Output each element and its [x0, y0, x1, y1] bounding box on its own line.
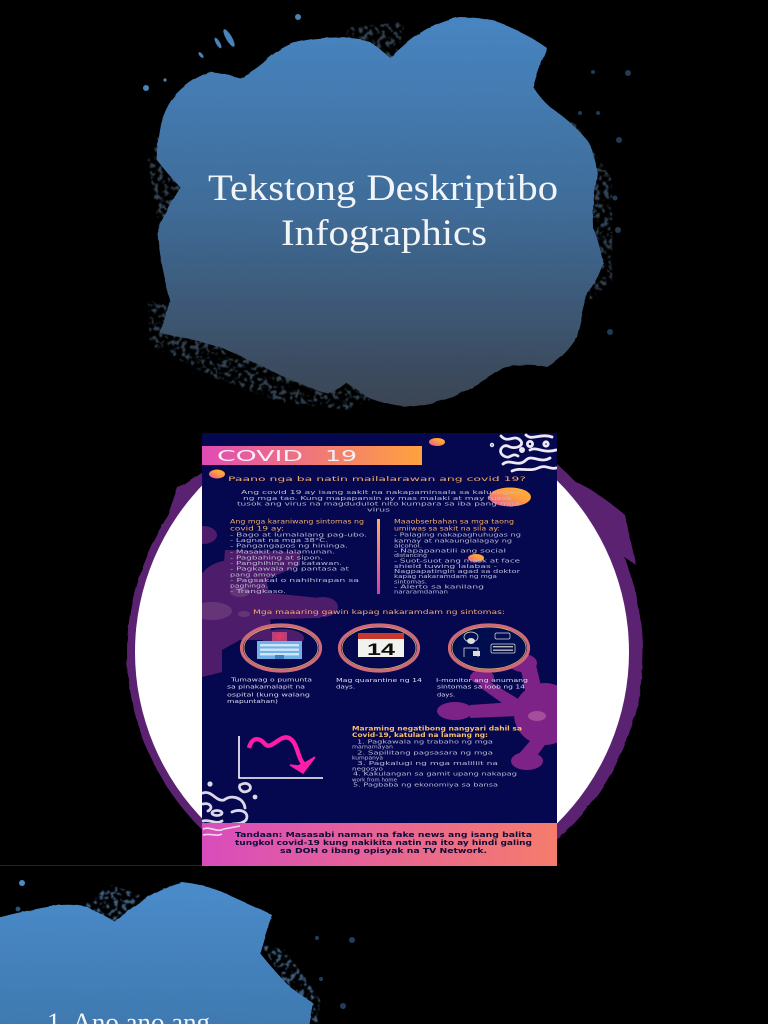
prevention column: Nagpapatingin agad sa doktor — [394, 569, 520, 575]
symptoms column: - Bago at lumalalang pag-ubo. — [230, 532, 367, 538]
symptoms column: pang amoy. — [230, 573, 277, 578]
squiggle decoration: top right — [491, 435, 556, 471]
negative effects list: kumpanya — [352, 756, 383, 762]
symptoms column: - Lagnat na mga 38°C. — [230, 538, 328, 544]
symptoms column — [230, 518, 367, 595]
prevention column: - Palaging nakapaghuhugas ng — [394, 532, 521, 538]
caption 3 — [436, 678, 529, 698]
symptoms column: Ang mga karaniwang sintomas ng — [230, 518, 364, 526]
prevention column: - Suot-suot ang mask at face — [394, 559, 520, 565]
negative effects list: mamamayan — [352, 746, 393, 751]
action 3: monitoring icon — [450, 625, 528, 671]
caption 1: ospital (kung walang — [227, 692, 311, 698]
symptoms column: - Pagbahing at sipon. — [230, 555, 323, 561]
intro paragraph: ng mga tao. Kung mapapansin ay mas malaki at may tusok — [243, 496, 512, 502]
slide separator — [0, 865, 202, 866]
prevention column: Maaobserbahan sa mga taong — [394, 518, 514, 526]
prevention column: sintomas. — [394, 579, 427, 585]
negative effects list: 2. Sapilitang pagsasara ng mga — [357, 750, 493, 756]
caption 2: Mag quarantine ng 14 — [336, 678, 423, 684]
caption 1 — [227, 677, 312, 705]
symptoms column: covid 19 ay: — [230, 526, 284, 532]
prevention column — [394, 518, 521, 596]
intro paragraph: virus — [367, 508, 391, 514]
reminder text — [235, 831, 532, 855]
prevention column: kamay at nakaunglalagay ng — [394, 538, 512, 544]
reminder band — [202, 823, 557, 866]
paint splash grunge edges — [148, 22, 612, 410]
caption 2: days. — [336, 685, 355, 691]
prevention column: kapag nakaramdam ng mga — [394, 574, 497, 580]
virus decoration: right — [437, 654, 557, 770]
paint splatter droplets — [143, 14, 631, 335]
reminder text: Tandaan: Masasabi naman na fake news ang isang balita — [235, 831, 532, 839]
purple paint ring — [126, 464, 644, 840]
caption 1: Tumawag o pumunta — [230, 677, 312, 683]
blue paint splash — [157, 17, 603, 407]
caption 1: sa pinakamalapit na — [227, 685, 305, 691]
negative effects list — [352, 726, 522, 789]
action 2: calendar icon: 14 — [367, 640, 396, 659]
blue paint splash — [0, 882, 313, 1024]
negative effects list: 1. Pagkawala ng trabaho ng mga — [357, 739, 493, 745]
symptoms column: - Trangkaso. — [230, 589, 286, 595]
poster text group — [228, 476, 526, 616]
reminder text: tungkol covid-19 kung nakikita natin na ito ay hindi galing — [235, 839, 532, 847]
prevention column: - Alerto sa kanilang — [394, 584, 484, 590]
prevention column: - Napapanatili ang social — [394, 549, 506, 555]
poster background — [202, 433, 557, 866]
caption 3: I-monitor ang anumang — [436, 678, 529, 684]
virus decoration: left — [189, 526, 338, 677]
prevention column: alcohol. — [394, 544, 422, 550]
actions heading: Mga maaaring gawin kapag nakaramdam ng sintomas: — [253, 609, 505, 616]
intro paragraph: tusok ang virus na magdudulot nito kumpara sa iba pang mga — [237, 502, 520, 508]
symptoms column: - Pangangapos ng hininga. — [230, 544, 348, 550]
declining line chart icon — [239, 736, 323, 778]
negative effects list: 5. Pagbaba ng ekonomiya sa bansa — [353, 783, 498, 789]
header bar — [202, 446, 422, 465]
symptoms column: - Pagsakal o nahihirapan sa — [230, 578, 359, 584]
symptoms column: - Panghihina ng katawan. — [230, 561, 342, 567]
caption 2 — [336, 678, 422, 690]
action 1: hospital icon — [242, 625, 320, 671]
heading: COVID 19: COVID — [217, 447, 303, 465]
negative effects list: negosyo — [352, 767, 383, 772]
poster: COVID 19 infographic — [189, 433, 576, 866]
negative effects list: 4. Kakulangan sa gamit upang nakapag — [353, 772, 517, 778]
caption 3: days. — [437, 692, 455, 698]
paint droplets — [16, 880, 355, 1009]
heading: COVID 19: 19 — [325, 447, 357, 465]
prevention column: shield tuwing lalabas - — [394, 564, 498, 570]
slide 1: title slide: Infographics — [281, 213, 487, 254]
slide title: Tekstong Deskriptibo — [208, 168, 558, 209]
squiggle decoration: bottom left — [203, 783, 256, 826]
reminder text: sa DOH o ibang opisyak na TV Network. — [280, 847, 487, 855]
intro paragraph: Ang covid 19 ay isang sakit na nakapaminsala sa kalusugan — [241, 490, 520, 496]
caption 1: mapuntahan) — [227, 699, 278, 705]
caption 3: sintomas sa loob ng 14 — [437, 685, 526, 691]
question heading: Paano nga ba natin mailalarawan ang covid 19? — [228, 476, 526, 483]
action 2: calendar icon — [340, 625, 418, 671]
intro paragraph — [237, 490, 520, 514]
symptoms column: - Pagkawala ng pantasa at — [230, 566, 349, 572]
heading: COVID 19 — [218, 450, 356, 461]
negative effects list: work from home — [352, 777, 397, 783]
speckled splash edge — [85, 885, 320, 1024]
negative effects list: Covid-19, katulad na lamang ng: — [352, 732, 488, 739]
symptoms column: - Masakit na lalamunan. — [230, 550, 335, 556]
column divider — [377, 519, 380, 594]
white circle — [135, 480, 629, 824]
slide 3: question slide — [0, 865, 355, 1024]
prevention column: distancing — [394, 553, 427, 559]
negative effects list: Maraming negatibong nangyari dahil sa — [352, 726, 522, 732]
prevention column: nararamdaman — [394, 590, 448, 596]
slide 1: title slide — [143, 14, 631, 410]
negative effects list: 3. Pagkalugi ng mga maliliit na — [357, 761, 498, 767]
slide 2 background: white circle with purple ring — [126, 464, 644, 840]
prevention column: umiiwas sa sakit na sila ay: — [394, 526, 500, 532]
decorative orange dots — [209, 438, 531, 562]
symptoms column: paghinga. — [230, 584, 268, 590]
action captions — [227, 677, 529, 705]
